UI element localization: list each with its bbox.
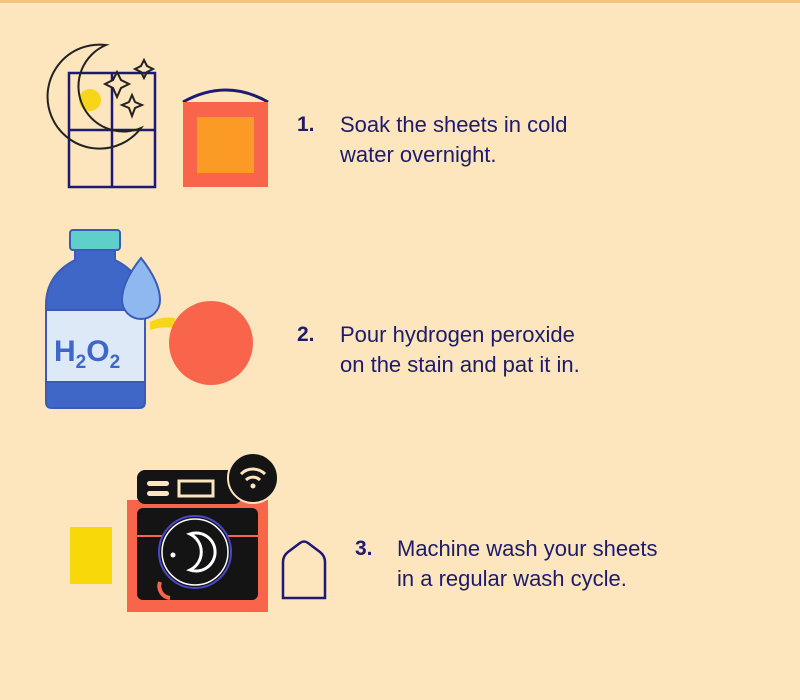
icon: soaking basin <box>183 90 268 187</box>
step 1 text: Soak the sheets in cold <box>340 112 567 137</box>
step 3 number: 3. <box>355 537 373 560</box>
icon: hydrogen peroxide bottle: 2 <box>76 352 86 373</box>
step 2 text <box>340 322 580 377</box>
step 3 text <box>397 536 657 591</box>
icon: hydrogen peroxide bottle: O <box>86 335 110 368</box>
step 1 number: 1. <box>297 113 315 136</box>
icon: hydrogen peroxide bottle: H <box>54 335 76 368</box>
icon: hydrogen peroxide bottle: 2 <box>110 352 120 373</box>
icon: night window <box>48 45 155 187</box>
step 2 text: on the stain and pat it in. <box>340 352 580 377</box>
step 3 text: Machine wash your sheets <box>397 536 657 561</box>
step 2 text: Pour hydrogen peroxide <box>340 322 575 347</box>
step 1 text: water overnight. <box>340 142 497 167</box>
step 3 text: in a regular wash cycle. <box>397 566 627 591</box>
icon: washing machine <box>70 453 325 612</box>
icon: hydrogen peroxide bottle <box>46 230 253 408</box>
step 2 number: 2. <box>297 323 315 346</box>
step 1 text <box>340 112 567 167</box>
